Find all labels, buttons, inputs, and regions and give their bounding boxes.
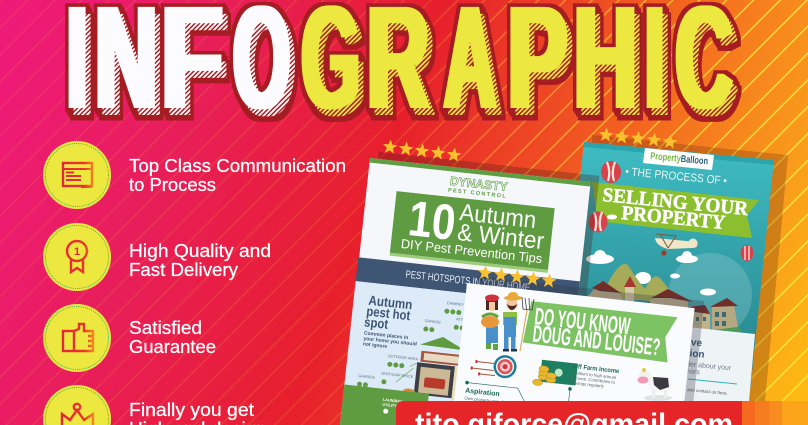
balloons <box>588 161 754 261</box>
heading: selling your property: SELLING YOUR <box>602 184 749 220</box>
text: guarantee <box>129 318 216 357</box>
off farm income text: savings regularly <box>571 380 605 389</box>
light blue hotspot panel: Common places in <box>364 330 409 341</box>
money and coins <box>532 359 578 389</box>
light blue hotspot panel: pest hot <box>366 304 411 323</box>
houses <box>586 276 744 336</box>
light blue hotspot panel: VENTS/AIR BRICK <box>381 371 414 379</box>
off farm income text: income. Contributes to <box>572 375 616 385</box>
target with arrows <box>471 352 518 379</box>
light blue hotspot panel: Autumn <box>368 293 413 312</box>
lower panel: der about your <box>686 361 732 372</box>
light blue hotspot panel <box>338 281 577 425</box>
icon: rosette <box>67 241 87 272</box>
lower panel: and contact us here, <box>687 387 728 396</box>
icon: crown <box>62 404 93 425</box>
light blue hotspot panel: CHIMNEY <box>447 301 465 307</box>
green footer: UTILITY ROOM <box>382 403 410 410</box>
feature 4: design <box>43 385 267 425</box>
green footer: LAUNDRY/ <box>383 398 403 404</box>
farmers <box>481 292 534 352</box>
lower panel <box>600 318 755 402</box>
navy band: PEST HOTSPOTS IN YOUR HOME <box>405 269 531 294</box>
icon: thumbs up <box>63 324 93 351</box>
green banner <box>390 189 555 273</box>
light blue hotspot panel: GARDEN <box>358 374 375 380</box>
house illustration <box>403 333 470 401</box>
rating stars: second card <box>598 127 678 149</box>
card: do you know doug and louise <box>452 275 704 425</box>
green banner: & Winter <box>456 219 545 255</box>
feature 1: communication <box>43 141 346 209</box>
text: design: Finally you get <box>129 400 254 420</box>
off farm income text: Off Farm Income <box>573 363 620 375</box>
title: INFOGRAPHIC <box>65 2 742 122</box>
card: selling your property <box>555 135 788 402</box>
rating stars: first card <box>382 139 462 162</box>
heading: the process of: • THE PROCESS OF • <box>625 166 727 188</box>
woman <box>481 294 499 350</box>
cow <box>638 368 672 401</box>
aspiration text <box>462 376 572 420</box>
heading: do you know doug and louise <box>531 303 663 361</box>
text: communication: to Process <box>129 175 216 195</box>
logo: PropertyBalloon <box>650 151 708 167</box>
text: communication: Top Class Communication <box>129 156 346 176</box>
logo: dynasty: DYNASTY <box>449 174 508 194</box>
card: 10 autumn and winter pest tips <box>338 151 599 425</box>
feature 3: guarantee <box>43 304 216 372</box>
green ribbon <box>522 301 678 363</box>
heading: selling your property: PROPERTY <box>621 202 727 234</box>
rating stars: third card <box>477 265 557 288</box>
green banner: Autumn <box>458 199 538 234</box>
aspiration text: Aspiration <box>465 387 500 398</box>
light blue hotspot panel: your home you should <box>363 336 417 348</box>
heading: do you know doug and louise: DO YOU KNOW <box>533 303 632 341</box>
feature 2: quality <box>43 223 271 291</box>
green footer <box>338 385 429 425</box>
logo: dynasty: PEST CONTROL <box>448 188 507 200</box>
plane <box>655 234 698 256</box>
light blue hotspot panel: ATTIC <box>456 317 467 322</box>
light blue hotspot panel: not ignore <box>363 341 388 350</box>
logo <box>643 148 714 170</box>
off farm income text: Medium to high annual <box>573 370 616 380</box>
text: guarantee: Guarantee <box>129 337 216 357</box>
icon: browser window <box>63 163 92 187</box>
text: design <box>129 400 267 425</box>
navy band <box>356 257 580 305</box>
off farm income text <box>571 363 620 390</box>
man <box>503 292 534 352</box>
text: quality: Fast Delivery <box>129 260 238 280</box>
lower panel: ears <box>686 368 701 376</box>
light blue hotspot panel: OUTDOOR AREA <box>387 354 419 361</box>
text: quality: High Quality and <box>129 241 271 261</box>
green banner: 10 <box>406 190 458 251</box>
hills <box>600 264 742 332</box>
icon: rosette: 1 <box>74 246 80 258</box>
green banner: DIY Pest Prevention Tips <box>400 236 543 266</box>
text: guarantee: Satisfied <box>129 318 202 338</box>
clouds <box>586 214 716 296</box>
heading: do you know doug and louise: DOUG AND LOUISE? <box>531 321 662 361</box>
lower panel: ive <box>688 337 703 349</box>
lower panel: tion <box>686 348 705 361</box>
light blue hotspot panel: GARAGE <box>425 319 442 325</box>
contact bar: email <box>396 401 808 425</box>
ribbon <box>592 182 759 238</box>
sun circles <box>668 253 752 337</box>
light blue hotspot panel: spot <box>363 314 389 332</box>
aspiration text: Own property-style life <box>464 395 508 405</box>
text: communication <box>129 156 346 195</box>
text: quality <box>129 241 271 280</box>
